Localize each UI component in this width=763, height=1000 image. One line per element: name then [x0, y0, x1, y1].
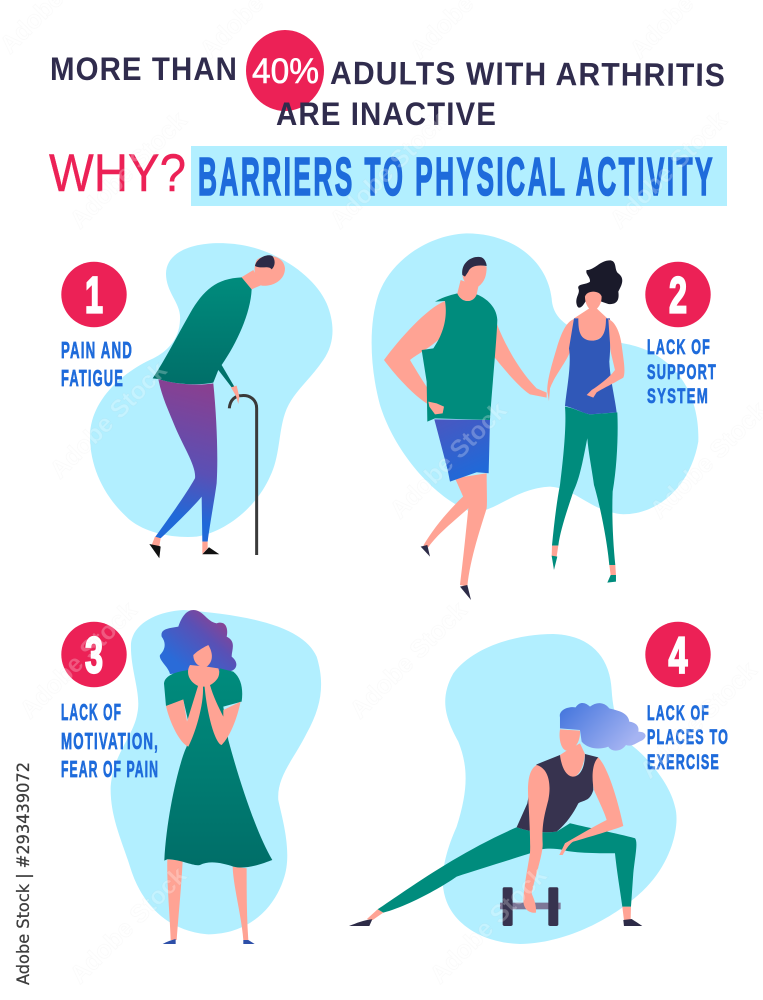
watermark: adobe stock repeats: Adobe Stock [344, 596, 472, 724]
badge: number 1: 1 [85, 266, 103, 324]
badge: number 3 [61, 622, 127, 687]
label: lack of motivation, fear of pain [61, 699, 159, 782]
label: lack of motivation, fear of pain: MOTIVATION, [61, 728, 159, 754]
label: pain and fatigue [61, 337, 133, 391]
illustration: worried woman in dress [111, 610, 321, 944]
badge: number 4: 4 [668, 626, 688, 684]
label: pain and fatigue: FATIGUE [61, 365, 124, 391]
label: lack of support system: LACK OF [647, 335, 711, 359]
title: more than 40% adults with arthritis are inactive: ARE INACTIVE [276, 96, 497, 132]
watermark: adobe stock repeats: Adobe Stock [64, 861, 192, 989]
label: lack of motivation, fear of pain: FEAR OF PAIN [61, 756, 159, 782]
badge: number 2 [645, 262, 711, 327]
illustration: woman lunging with dumbbell [349, 634, 677, 944]
panel: 4 lack of places to exercise [349, 622, 729, 944]
watermark: adobe stock repeats: Adobe Stock [44, 356, 172, 484]
title: more than 40% adults with arthritis are inactive [50, 30, 726, 132]
panel: 2 lack of support system [372, 233, 717, 600]
watermark: adobe stock repeats: Adobe Stock [384, 396, 512, 524]
heading: why?: WHY? [49, 144, 186, 203]
badge: number 1 [61, 262, 127, 327]
credit: adobe stock id: Adobe Stock | #293439072 [14, 762, 34, 985]
label: lack of support system: SYSTEM [647, 384, 709, 408]
badge: number 4 [645, 622, 711, 687]
illustration: couple holding hands [372, 233, 698, 600]
watermark: adobe stock repeats: Adobe Stock [634, 656, 762, 784]
label: lack of places to exercise: LACK OF [647, 701, 710, 725]
label: lack of places to exercise [647, 701, 729, 774]
watermark: adobe stock repeats: Adobe Stock [64, 106, 192, 234]
title: more than 40% adults with arthritis are inactive: 40% [252, 52, 319, 91]
badge: number 3: 3 [85, 626, 103, 684]
label: lack of support system: SUPPORT [647, 360, 717, 384]
badge: 40% circle [246, 30, 324, 111]
title: more than 40% adults with arthritis are inactive: ADULTS WITH ARTHRITIS [330, 55, 726, 93]
panel: 3 lack of motivation, fear of pain [61, 610, 321, 944]
label: pain and fatigue: PAIN AND [61, 337, 133, 363]
badge: number 2: 2 [669, 266, 687, 324]
label: lack of support system [647, 335, 717, 408]
watermark: adobe stock repeats: Adobe Stock [14, 596, 142, 724]
panel: 1 pain and fatigue [61, 243, 333, 558]
watermark: adobe stock repeats: Adobe Stock [604, 106, 732, 234]
label: lack of motivation, fear of pain: LACK OF [61, 699, 122, 725]
illustration: old man with cane [90, 243, 333, 558]
watermark: adobe stock repeats: Adobe Stock [424, 861, 552, 989]
watermark: adobe stock repeats: Adobe Stock [324, 106, 452, 234]
title: more than 40% adults with arthritis are inactive: MORE THAN [50, 51, 238, 87]
